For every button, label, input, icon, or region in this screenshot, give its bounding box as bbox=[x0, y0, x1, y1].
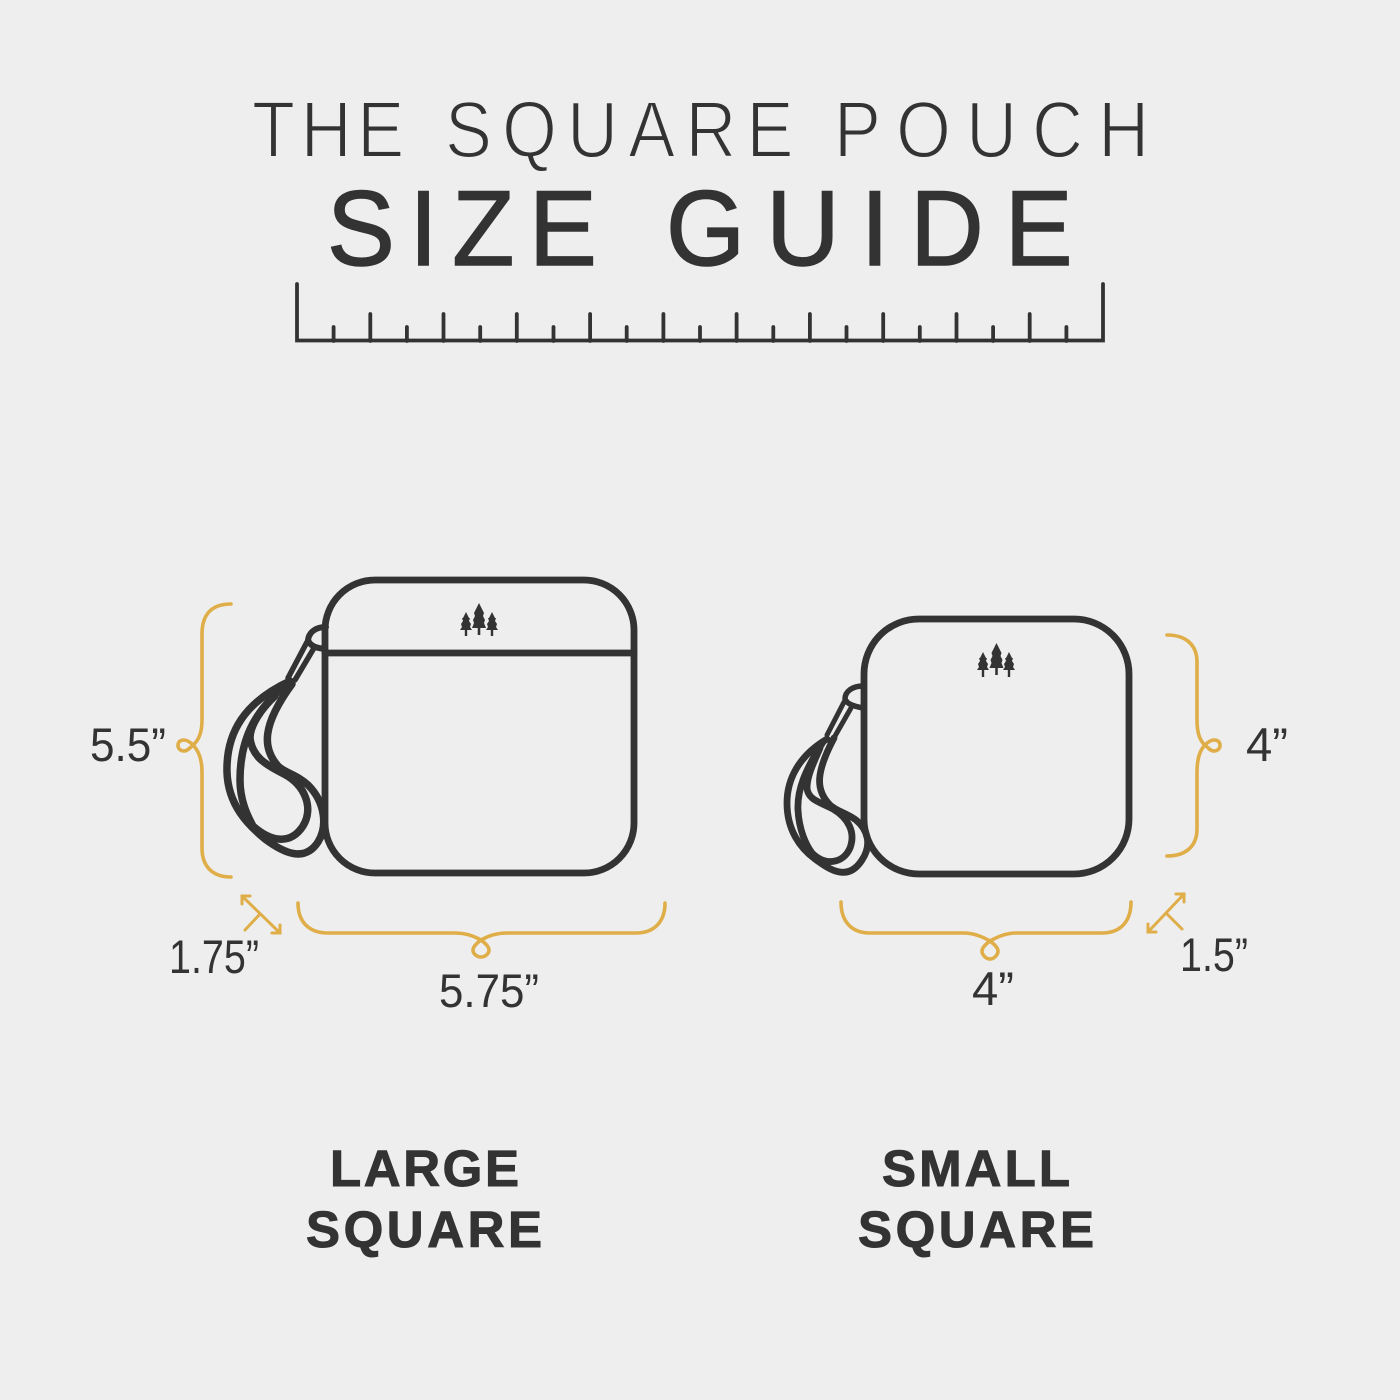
caption: large square: SQUARE bbox=[306, 1201, 542, 1258]
label: 1.75 inches: 1.75” bbox=[169, 930, 259, 983]
heading: size guide: GUIDE bbox=[666, 170, 1073, 289]
brace: large width bbox=[298, 903, 665, 957]
pouch body bbox=[864, 619, 1129, 874]
strap: ring, cord and loops bbox=[787, 686, 868, 872]
arrow: large depth bbox=[242, 896, 280, 933]
strap: ring, cord and loops bbox=[227, 627, 326, 854]
brace: small width bbox=[841, 902, 1131, 959]
brace: large height bbox=[178, 604, 231, 877]
label: 1.5 inches: 1.5” bbox=[1180, 928, 1248, 981]
title: the square pouch: THE bbox=[252, 85, 404, 174]
label: 4 inches height: 4” bbox=[1246, 718, 1288, 771]
heading: size guide: SIZE bbox=[327, 170, 597, 289]
caption: small square bbox=[858, 1140, 1094, 1258]
title: the square pouch bbox=[252, 85, 1149, 174]
caption: small square: SMALL bbox=[882, 1140, 1070, 1197]
icon: ruler bbox=[297, 284, 1103, 341]
label: 5.75 inches: 5.75” bbox=[439, 964, 539, 1017]
label: 4 inches width: 4” bbox=[972, 962, 1014, 1015]
logo: three trees bbox=[977, 643, 1015, 677]
label: 5.5 inches: 5.5” bbox=[90, 718, 166, 771]
brace: small height bbox=[1167, 635, 1220, 856]
logo: three trees bbox=[460, 603, 498, 636]
caption: small square: SQUARE bbox=[858, 1201, 1094, 1258]
pouch body bbox=[325, 580, 634, 873]
arrow: small depth bbox=[1148, 894, 1184, 932]
illustration: large square pouch bbox=[227, 580, 634, 873]
illustration: small square pouch bbox=[787, 619, 1129, 874]
caption: large square bbox=[306, 1140, 542, 1258]
title: the square pouch: POUCH bbox=[834, 85, 1149, 174]
caption: large square: LARGE bbox=[330, 1140, 519, 1197]
title: the square pouch: SQUARE bbox=[445, 85, 793, 174]
heading: size guide bbox=[327, 170, 1073, 289]
zipper line bbox=[325, 650, 634, 656]
